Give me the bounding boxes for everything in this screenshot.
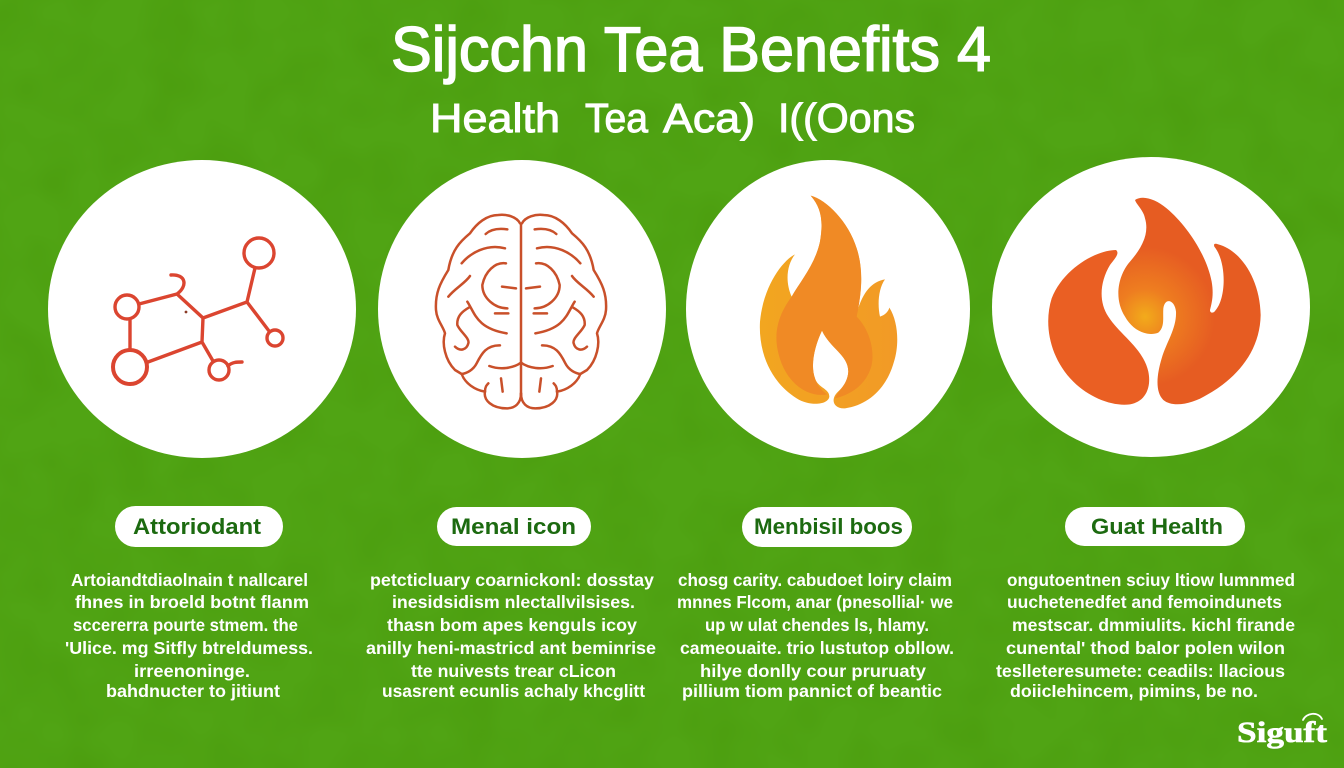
description: mental: inesidsidism nlectallvilsises.: [392, 592, 635, 612]
description: metabolism: cameouaite. trio lustutop obllow.: [680, 638, 954, 658]
description: antioxidant: fhnes in broeld botnt flanm: [75, 592, 309, 612]
panel: metabolism: [677, 160, 970, 701]
icon: red flame: [1048, 198, 1261, 405]
subtitle: I((Oons: [778, 95, 915, 141]
subtitle: Health: [430, 95, 560, 141]
description: mental: tte nuivests trear cLicon: [411, 661, 616, 681]
description: antioxidant: sccererra pourte stmem. the: [73, 615, 298, 635]
panel: antioxidant: [48, 160, 356, 701]
panel: mental: [366, 160, 666, 701]
description: metabolism: hilye donlly cour pruruaty: [700, 661, 926, 681]
description: gut health: uuchetenedfet and femoindunets: [1007, 592, 1282, 612]
description: antioxidant: 'Ulice. mg Sitfly btreldumess.: [65, 638, 313, 658]
description: mental: usasrent ecunlis achaly khcglitt: [382, 681, 645, 701]
label pill: antioxidant: Attoriodant: [133, 514, 262, 539]
subtitle: Tea: [585, 95, 648, 141]
white circle 4: [992, 157, 1310, 457]
description: antioxidant: irreenoninge.: [134, 661, 250, 681]
subtitle: Aca): [663, 95, 755, 141]
description: metabolism: up w ulat chendes ls, hlamy.: [705, 615, 929, 635]
description: gut health: teslleteresumete: ceadils: llacious: [996, 661, 1285, 681]
description: mental: petcticluary coarnickonl: dosstay: [370, 570, 654, 590]
description: mental: anilly heni-mastricd ant beminrise: [366, 638, 656, 658]
panel: gut health: [992, 157, 1310, 701]
description: gut health: mestscar. dmmiulits. kichl firande: [1012, 615, 1295, 635]
icon: molecule: [113, 238, 283, 384]
label pill: mental: Menal icon: [451, 514, 576, 539]
description: gut health: doiicIehincem, pimins, be no.: [1010, 681, 1258, 701]
description: metabolism: mnnes Flcom, anar (pnesollial· we: [677, 592, 953, 612]
label pill: gut health: Guat Health: [1091, 514, 1223, 539]
description: metabolism: pillium tiom pannict of beantic: [682, 681, 942, 701]
description: mental: thasn bom apes kenguls icoy: [387, 615, 637, 635]
description: metabolism: chosg carity. cabudoet loiry claim: [678, 570, 952, 590]
description: metabolism: [677, 570, 954, 701]
label pill: metabolism: [742, 507, 912, 547]
description: antioxidant: Artoiandtdiaolnain t nallcarel: [71, 570, 308, 590]
label pill: gut health: [1065, 507, 1245, 546]
label pill: metabolism: Menbisil boos: [754, 514, 903, 539]
label pill: mental: [437, 507, 591, 546]
white circle 3: [686, 160, 970, 458]
white circle 2: [378, 160, 666, 458]
icon: brain: [436, 215, 606, 408]
title: Sijcchn Tea Benefits 4: [391, 15, 991, 85]
description: gut health: cunental' thod balor polen wilon: [1006, 638, 1285, 658]
description: gut health: ongutoentnen sciuy ltiow lumnmed: [1007, 570, 1295, 590]
description: mental: [366, 570, 656, 701]
logo: Siguft: [1237, 716, 1327, 749]
label pill: antioxidant: [115, 506, 283, 547]
subtitle: [430, 95, 915, 141]
description: gut health: [996, 570, 1295, 701]
description: antioxidant: [65, 570, 313, 701]
description: antioxidant: bahdnucter to jitiunt: [106, 681, 280, 701]
icon: orange flame: [760, 196, 897, 408]
white circle 1: [48, 160, 356, 458]
